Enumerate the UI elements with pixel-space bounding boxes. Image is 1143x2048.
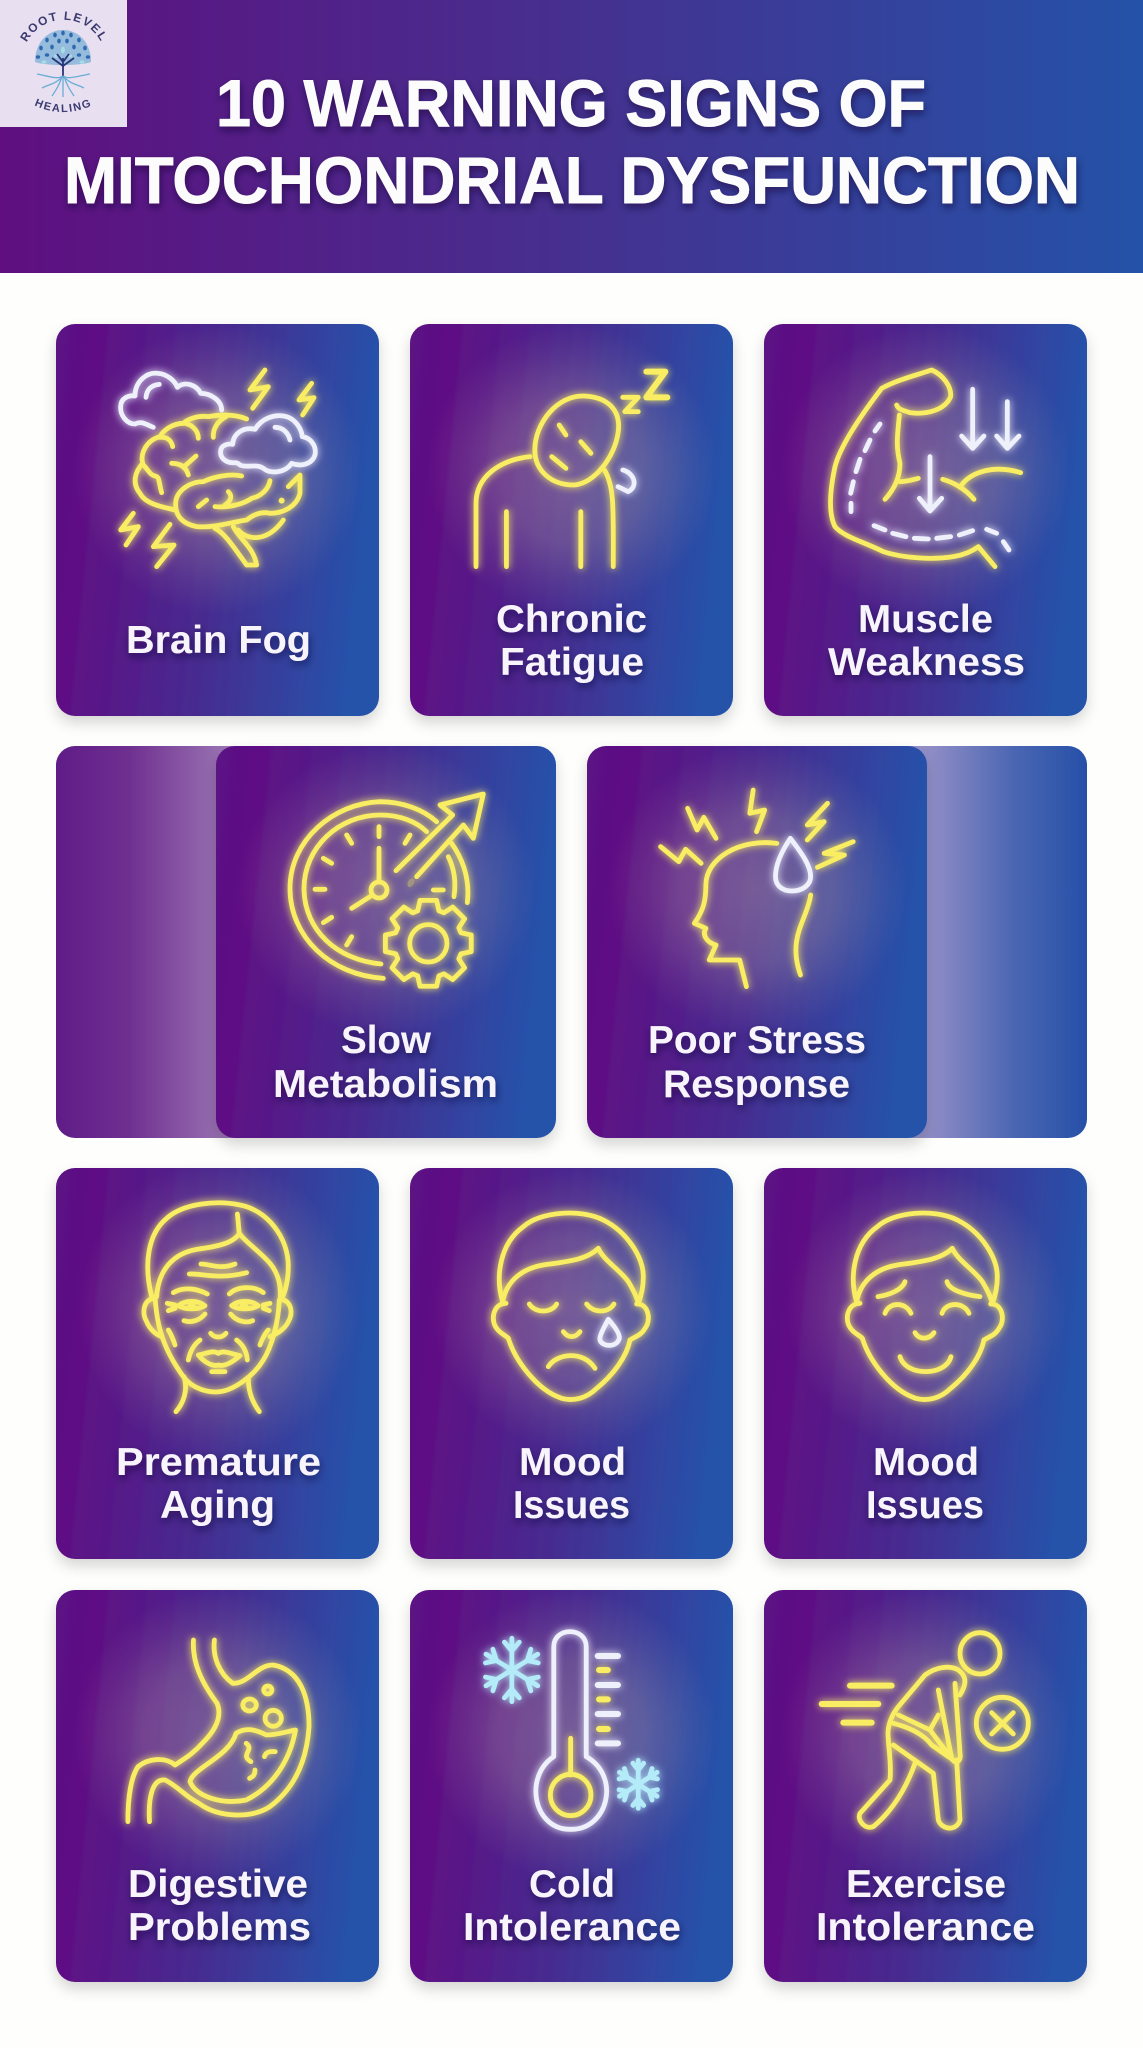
panel: Exercise Intolerance — [764, 1590, 1087, 1982]
title: MITOCHONDRIAL DYSFUNCTION — [64, 143, 1080, 217]
panel: Digestive Problems — [56, 1590, 379, 1982]
backing panel right — [847, 746, 1087, 1138]
label: Poor Stress Response: Poor Stress — [648, 1019, 866, 1062]
label: Mood Issues: Issues — [866, 1484, 984, 1527]
title — [64, 66, 1080, 217]
panel: Premature Aging — [56, 1160, 379, 1559]
icon: clock arrow and gear — [290, 794, 483, 986]
label: Mood Issues: Issues — [513, 1484, 630, 1527]
label: Premature Aging: Premature — [116, 1441, 321, 1484]
icon: drooping tired figure — [476, 372, 667, 567]
icon: stressed head with sweat drop — [661, 790, 853, 987]
title: 10 WARNING SIGNS OF — [216, 66, 926, 140]
label: Slow Metabolism — [273, 1019, 498, 1106]
panel: Slow Metabolism — [216, 745, 556, 1138]
header banner — [0, 0, 1143, 273]
panel: Chronic Fatigue — [410, 324, 733, 716]
label: Mood Issues — [866, 1441, 984, 1527]
label: Poor Stress Response — [648, 1019, 866, 1106]
label: Cold Intolerance — [463, 1863, 681, 1949]
label: Exercise Intolerance: Intolerance — [816, 1906, 1035, 1949]
panel: Cold Intolerance — [410, 1590, 733, 1982]
label: Muscle Weakness: Muscle — [858, 598, 993, 641]
backing panel left — [56, 746, 296, 1138]
icon: brain with clouds and lightning — [121, 370, 315, 567]
label: Poor Stress Response: Response — [663, 1063, 850, 1106]
label: Cold Intolerance: Cold — [529, 1863, 615, 1906]
label: Chronic Fatigue — [496, 598, 647, 684]
icon: weak arm with down arrows — [831, 370, 1021, 567]
label: Digestive Problems: Digestive — [128, 1863, 308, 1906]
panel: Mood Issues (smiling) — [764, 1168, 1087, 1559]
label: Muscle Weakness: Weakness — [828, 641, 1025, 684]
label: Digestive Problems: Problems — [128, 1906, 311, 1949]
label: Muscle Weakness — [828, 598, 1025, 684]
icon: thermometer with snowflakes — [485, 1632, 657, 1829]
label: Cold Intolerance: Intolerance — [463, 1906, 681, 1949]
label: Slow Metabolism: Metabolism — [273, 1063, 498, 1106]
label: Exercise Intolerance: Exercise — [846, 1863, 1006, 1906]
label: Chronic Fatigue: Chronic — [496, 598, 647, 641]
panel: Brain Fog — [56, 324, 379, 716]
label: Digestive Problems — [128, 1863, 311, 1949]
label: Slow Metabolism: Slow — [341, 1019, 432, 1062]
label: Mood Issues: Mood — [873, 1441, 979, 1484]
label: Mood Issues: Mood — [519, 1441, 626, 1484]
icon: stomach — [128, 1640, 309, 1822]
logo: Root Level Healing — [0, 0, 127, 127]
label: Premature Aging: Aging — [160, 1484, 275, 1527]
label: Chronic Fatigue: Fatigue — [500, 641, 644, 684]
panel: Mood Issues (sad) — [410, 1168, 733, 1559]
label: Mood Issues — [513, 1441, 630, 1527]
label: Exercise Intolerance — [816, 1863, 1035, 1949]
logo: Root Level Healing: HEALING — [34, 98, 90, 112]
panel: Poor Stress Response — [587, 745, 927, 1138]
panel: Muscle Weakness — [764, 324, 1087, 716]
label: Brain Fog: Brain Fog — [126, 619, 311, 662]
icon: exhausted runner — [822, 1633, 1028, 1828]
logo: Root Level Healing: ROOT LEVEL — [20, 12, 105, 42]
icon: aged face — [144, 1203, 291, 1412]
label: Premature Aging — [116, 1441, 321, 1527]
icon: worried smiling face — [847, 1213, 1002, 1400]
icon: crying face — [493, 1213, 648, 1400]
